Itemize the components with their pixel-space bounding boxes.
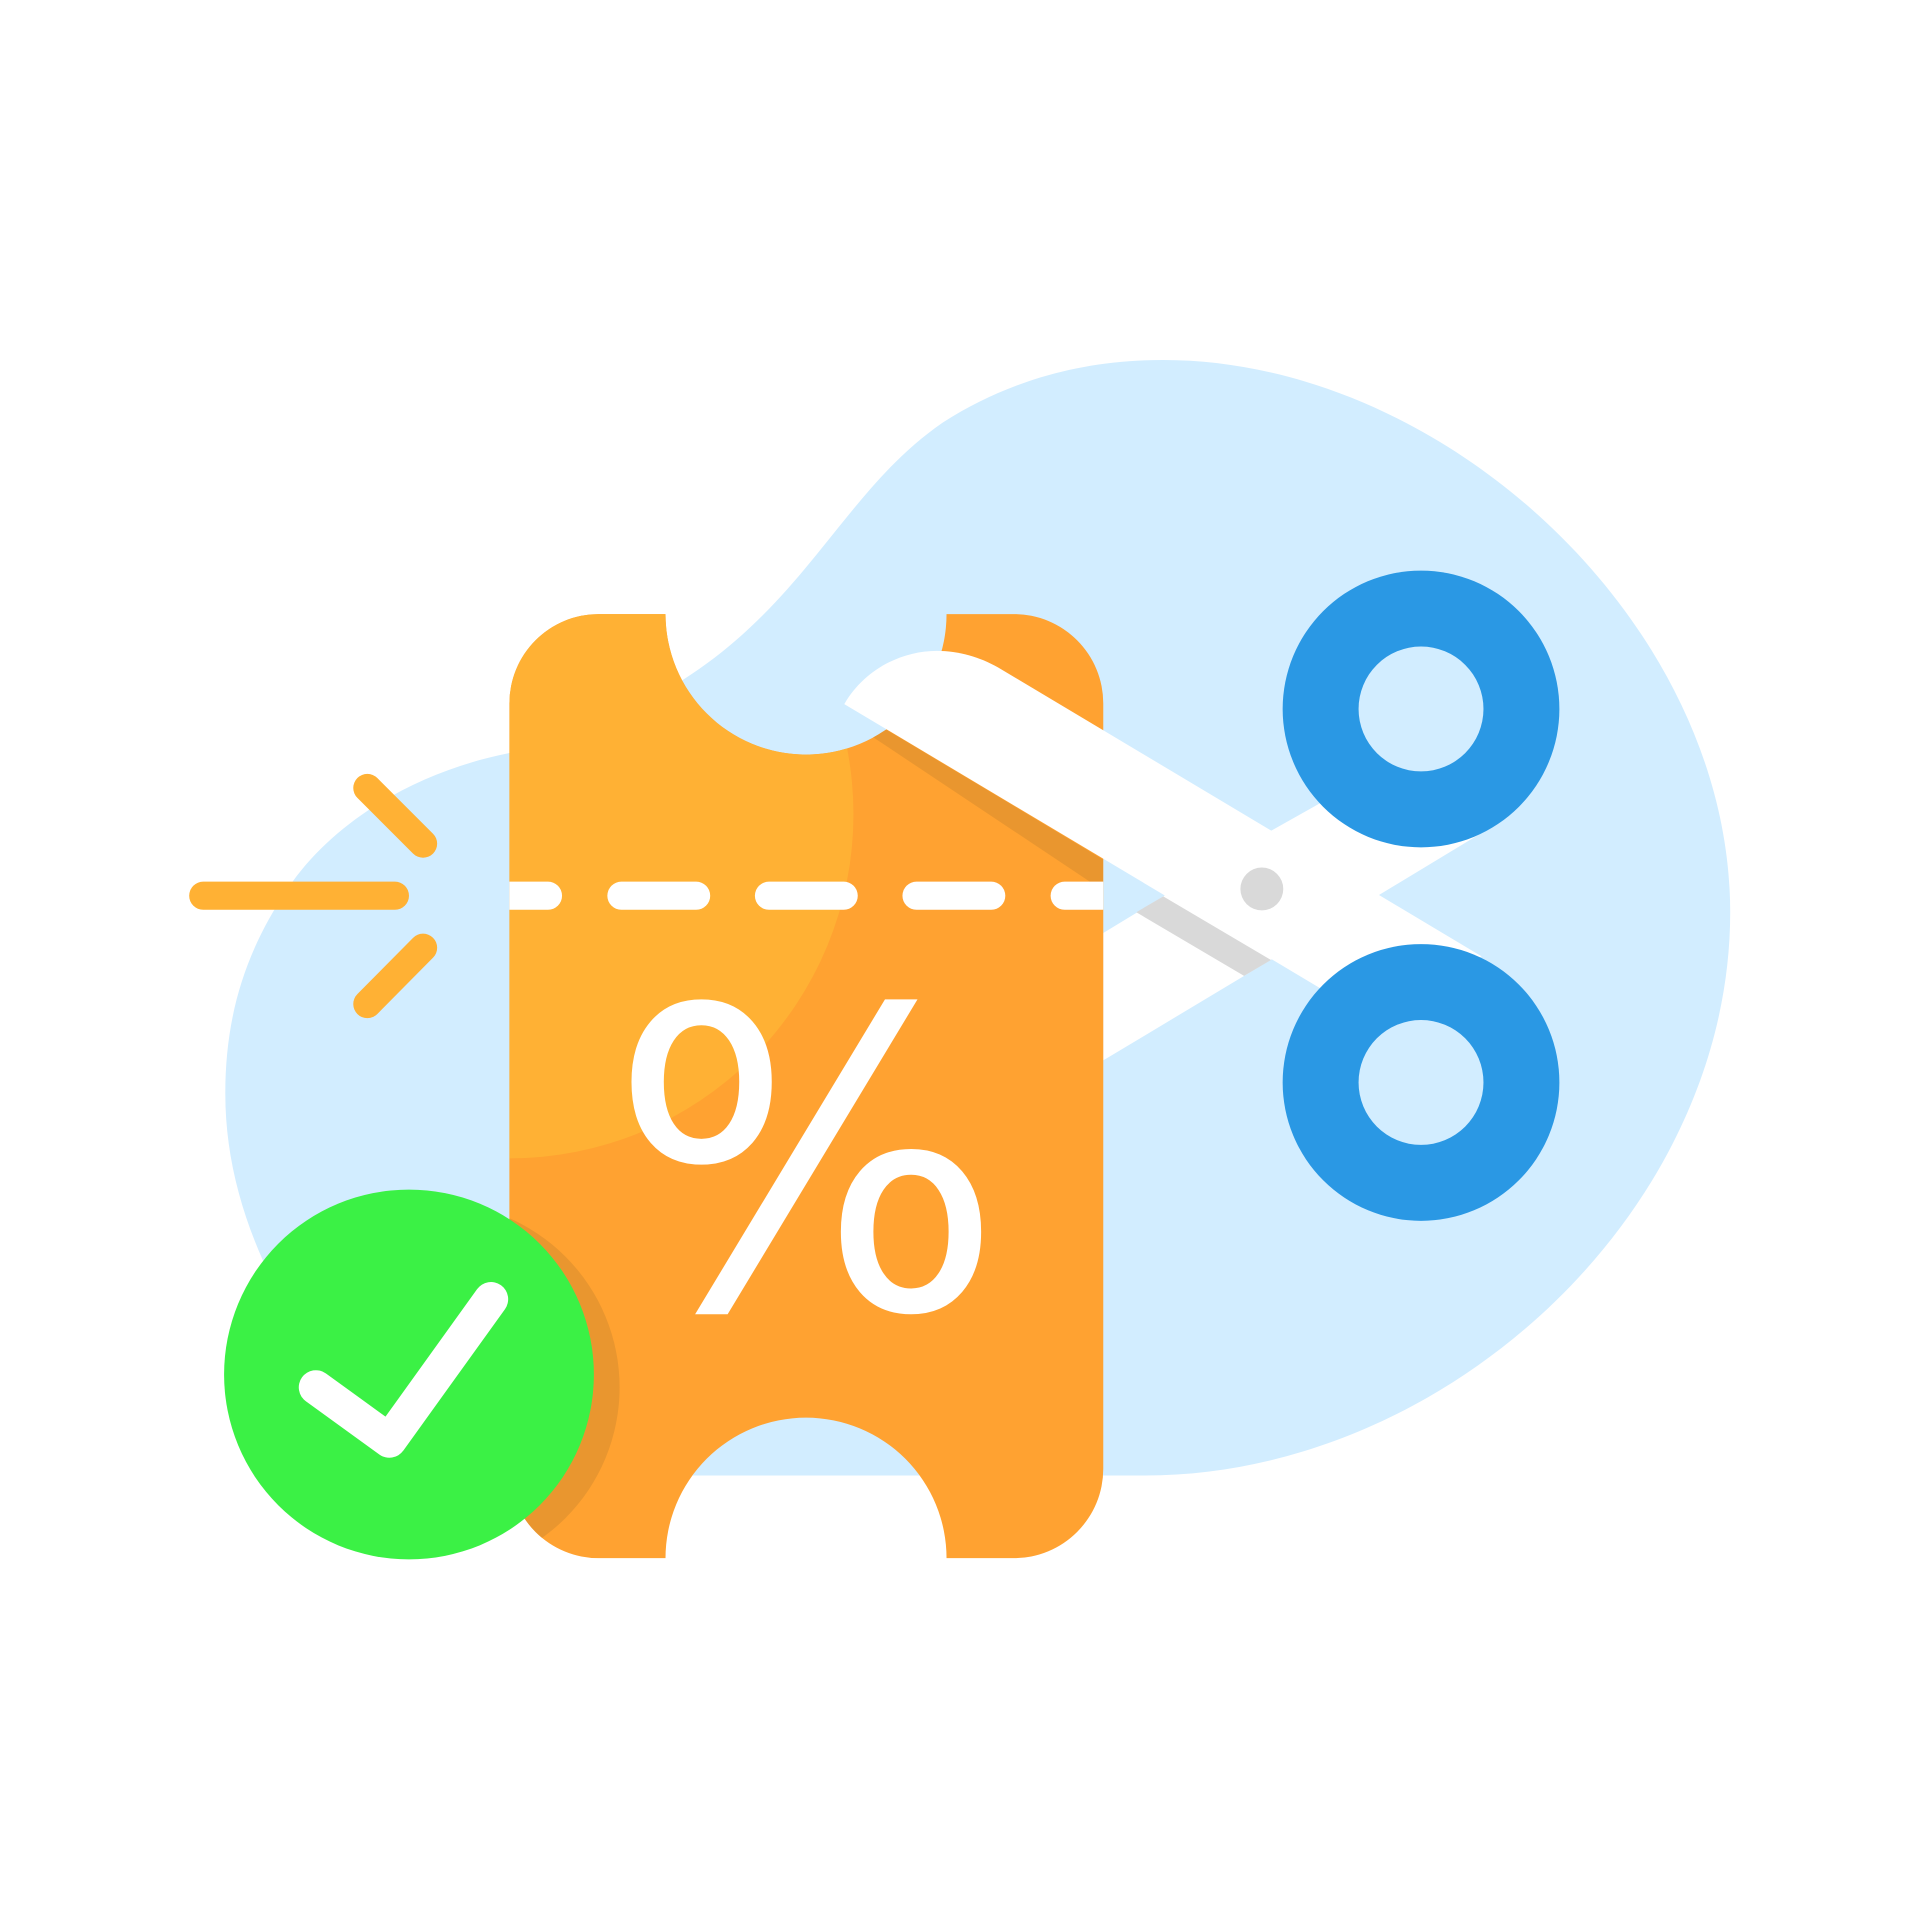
scissor handle: top — [1283, 571, 1559, 847]
lower scissor blade — [1103, 784, 1478, 1060]
icon: check mark — [316, 1299, 491, 1441]
percent sign: % — [609, 923, 1004, 1407]
perforated cut line — [509, 882, 1103, 910]
ticket highlight circle — [509, 614, 854, 1158]
badge shadow on ticket — [509, 1218, 620, 1538]
motion lines — [203, 788, 423, 1004]
scissors pivot — [1240, 868, 1283, 910]
icon: green check badge — [224, 1190, 594, 1559]
scissors shadow on ticket — [869, 730, 1103, 882]
ticket body — [509, 614, 1103, 1558]
upper scissor blade — [844, 651, 1482, 994]
scissor handle: bottom — [1283, 944, 1559, 1221]
discount ticket — [509, 614, 1104, 1558]
lower blade shadow — [1136, 896, 1271, 976]
background blob — [225, 360, 1730, 1476]
